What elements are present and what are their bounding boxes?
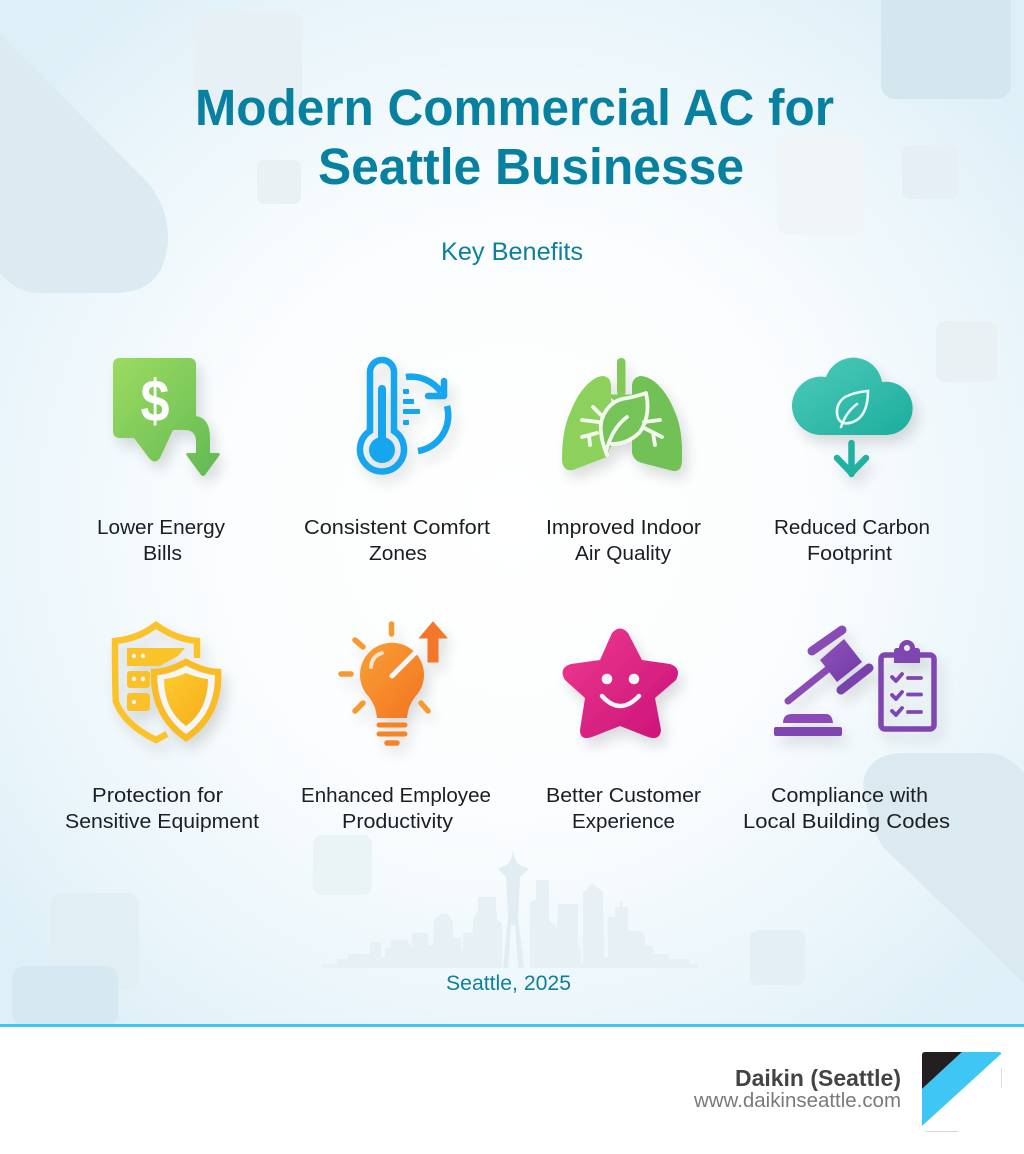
- label: improved indoor air quality: Improved Indoor: [546, 516, 701, 539]
- label: protection for sensitive equipment: Protection for: [92, 784, 223, 807]
- icon: consistent comfort zones: [360, 360, 448, 471]
- icon: protection for sensitive equipment: [115, 625, 218, 740]
- label: lower energy bills: Lower Energy: [97, 516, 226, 539]
- icon: reduced carbon footprint: [792, 358, 913, 474]
- label: better customer experience: Better Customer: [546, 784, 701, 807]
- logo: [922, 1052, 1002, 1132]
- label: compliance with local building codes: Compliance with: [771, 784, 928, 807]
- icon: lower energy bills: [113, 358, 220, 476]
- label: reduced carbon footprint: [774, 516, 930, 565]
- label: reduced carbon footprint: Reduced Carbon: [774, 516, 930, 539]
- label: consistent comfort zones: Consistent Comfort: [304, 516, 490, 539]
- location and date caption: Seattle, 2025: [446, 972, 571, 995]
- subtitle: key benefits: Key Benefits: [441, 238, 583, 266]
- icon: better customer experience: [563, 628, 678, 738]
- label: enhanced employee productivity: Enhanced Employee: [301, 784, 491, 807]
- label: consistent comfort zones: [304, 516, 490, 565]
- label: improved indoor air quality: [546, 516, 701, 565]
- icon: compliance gavel and clipboard: [774, 630, 934, 736]
- icon: enhanced employee productivity: [341, 622, 447, 743]
- label: enhanced employee productivity: Productivity: [342, 810, 454, 833]
- footer panel: [0, 1027, 1024, 1154]
- title: Seattle Businesse: [318, 138, 744, 195]
- label: lower energy bills: Bills: [143, 542, 182, 565]
- title: [195, 79, 834, 195]
- label: protection for sensitive equipment: Sensitive Equipment: [65, 810, 259, 833]
- label: protection for sensitive equipment: [65, 784, 259, 833]
- footer divider line: [0, 1024, 1024, 1027]
- icon: lower energy bills: $: [140, 368, 170, 434]
- label: compliance with local building codes: Local Building Codes: [743, 810, 950, 833]
- label: reduced carbon footprint: Footprint: [807, 542, 892, 565]
- seattle skyline silhouette: [323, 850, 698, 968]
- website: www.daikinseattle.com: [693, 1089, 901, 1112]
- label: better customer experience: Experience: [572, 810, 675, 833]
- label: improved indoor air quality: Air Quality: [575, 542, 672, 565]
- icon: improved indoor air quality: [562, 358, 682, 471]
- label: compliance with local building codes: [743, 784, 950, 833]
- label: consistent comfort zones: Zones: [369, 542, 427, 565]
- label: better customer experience: [546, 784, 701, 833]
- label: enhanced employee productivity: [301, 784, 491, 833]
- label: lower energy bills: [97, 516, 226, 565]
- brand name: Daikin (Seattle): [735, 1065, 901, 1091]
- title: Modern Commercial AC for: [195, 79, 834, 136]
